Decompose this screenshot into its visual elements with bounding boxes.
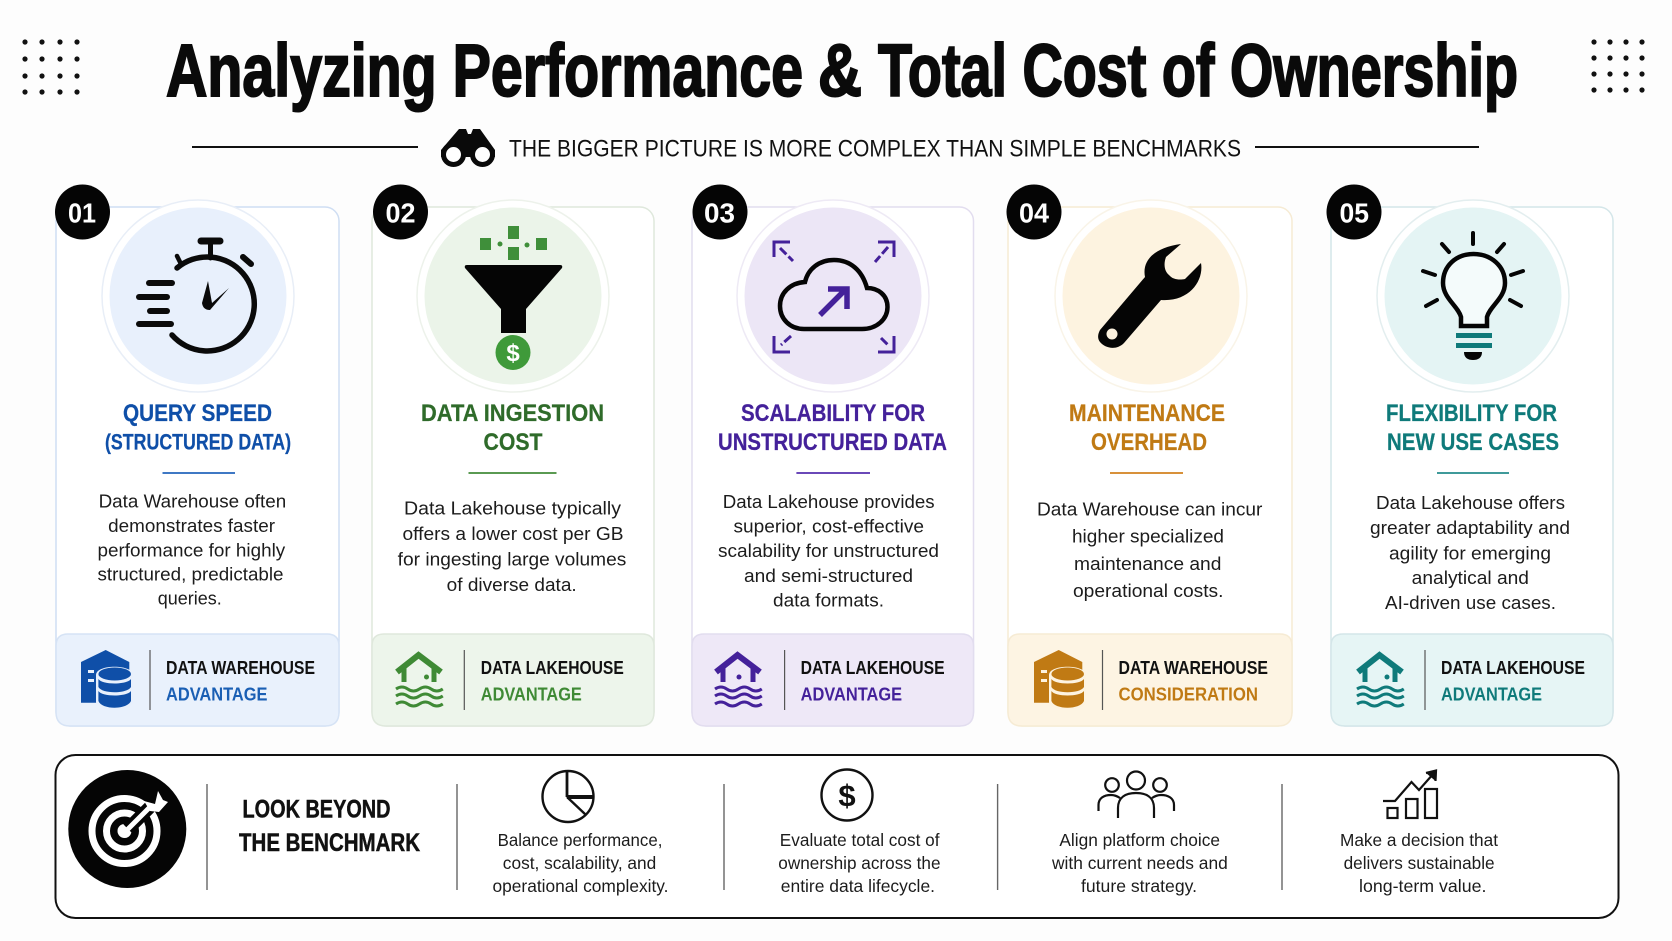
heading: OVERHEAD bbox=[1091, 429, 1207, 456]
body text bbox=[718, 491, 939, 610]
heading bbox=[421, 400, 604, 456]
callout heading: LOOK BEYOND bbox=[242, 796, 390, 824]
icon: dollar circle: $ bbox=[838, 778, 856, 813]
heading: QUERY SPEED bbox=[123, 400, 272, 427]
label: ADVANTAGE bbox=[166, 684, 268, 704]
item: decision bbox=[1340, 770, 1498, 896]
body text bbox=[98, 490, 286, 608]
label: ADVANTAGE bbox=[801, 684, 902, 704]
body text: greater adaptability and bbox=[1370, 517, 1570, 538]
number badge 03 bbox=[692, 184, 748, 240]
body text: agility for emerging bbox=[1389, 542, 1551, 564]
icon: dollar circle bbox=[822, 770, 872, 820]
card 05 advantage footer bbox=[1331, 634, 1613, 726]
panel: look beyond the benchmark bbox=[56, 755, 1618, 918]
panel: card 01 query speed bbox=[55, 184, 339, 726]
item: align: with current needs and bbox=[1051, 853, 1228, 873]
heading: SCALABILITY FOR bbox=[741, 400, 925, 427]
number badge 04 bbox=[1006, 184, 1062, 240]
body text: data formats. bbox=[773, 590, 884, 610]
heading: (STRUCTURED DATA) bbox=[105, 430, 291, 454]
number badge 02 bbox=[373, 184, 428, 240]
heading bbox=[105, 400, 291, 454]
body text: Data Lakehouse typically bbox=[404, 498, 622, 518]
body text: queries. bbox=[158, 588, 222, 608]
heading bbox=[718, 400, 947, 456]
label: DATA LAKEHOUSE bbox=[801, 657, 945, 678]
body text: AI-driven use cases. bbox=[1385, 592, 1556, 613]
item: total cost bbox=[778, 770, 940, 896]
panel: card 04 maintenance overhead bbox=[1006, 184, 1292, 726]
icon circle: funnel bbox=[417, 200, 609, 392]
heading: NEW USE CASES bbox=[1387, 429, 1559, 456]
heading bbox=[1386, 400, 1559, 456]
icon: people bbox=[1098, 772, 1174, 818]
panel: card 02 data ingestion cost bbox=[372, 184, 654, 726]
item: decision: long-term value. bbox=[1359, 876, 1486, 896]
heading: UNSTRUCTURED DATA bbox=[718, 429, 947, 456]
item: balance bbox=[492, 771, 668, 896]
label: DATA LAKEHOUSE bbox=[481, 657, 624, 678]
icon: target with arrow bbox=[68, 770, 186, 888]
card 03 advantage footer bbox=[692, 634, 974, 726]
subtitle text: THE BIGGER PICTURE IS MORE COMPLEX THAN SIMPLE BENCHMARKS bbox=[509, 136, 1241, 162]
body text bbox=[1370, 492, 1570, 613]
number badge 05: 05 bbox=[1340, 198, 1369, 228]
body text: demonstrates faster bbox=[108, 515, 275, 536]
number badge 04: 04 bbox=[1019, 198, 1049, 228]
number badge 01 bbox=[55, 184, 110, 240]
icon circle: cloud scaling bbox=[737, 200, 929, 392]
label: CONSIDERATION bbox=[1118, 684, 1258, 704]
label bbox=[166, 657, 315, 704]
body text: scalability for unstructured bbox=[718, 540, 939, 561]
title bbox=[166, 29, 1518, 112]
item: balance: operational complexity. bbox=[492, 876, 668, 896]
body text: Data Lakehouse offers bbox=[1376, 492, 1565, 513]
item: balance: cost, scalability, and bbox=[503, 853, 656, 873]
icon circle: wrench bbox=[1055, 200, 1247, 392]
body text: superior, cost-effective bbox=[734, 516, 924, 536]
icon circle: funnel: $ bbox=[506, 340, 520, 367]
heading: COST bbox=[484, 429, 543, 456]
body text: Data Warehouse often bbox=[99, 490, 286, 512]
label: ADVANTAGE bbox=[1441, 684, 1542, 704]
card 01 advantage footer bbox=[56, 634, 339, 726]
icon: binoculars bbox=[441, 129, 495, 164]
heading bbox=[1069, 400, 1225, 456]
body text: Data Lakehouse provides bbox=[723, 491, 935, 512]
body text: higher specialized bbox=[1072, 526, 1224, 546]
label: DATA LAKEHOUSE bbox=[1441, 657, 1585, 678]
label bbox=[1118, 657, 1268, 704]
callout heading: THE BENCHMARK bbox=[239, 829, 420, 857]
body text: for ingesting large volumes bbox=[398, 548, 626, 570]
decorative dot grid left bbox=[22, 39, 80, 95]
label: DATA WAREHOUSE bbox=[166, 657, 315, 678]
label bbox=[801, 657, 945, 704]
title: & bbox=[818, 29, 862, 112]
icon: data lakehouse bbox=[1357, 655, 1404, 706]
item: align: future strategy. bbox=[1081, 876, 1197, 896]
icon: data warehouse bbox=[1034, 650, 1086, 710]
card 04 consideration footer bbox=[1008, 634, 1292, 726]
body text: analytical and bbox=[1412, 567, 1529, 588]
body text: operational costs. bbox=[1073, 580, 1224, 601]
heading: FLEXIBILITY FOR bbox=[1386, 400, 1557, 427]
body text: performance for highly bbox=[98, 540, 286, 560]
body text: structured, predictable bbox=[98, 564, 284, 584]
item: total cost: entire data lifecycle. bbox=[781, 876, 935, 896]
card 02 advantage footer bbox=[372, 634, 654, 726]
heading: MAINTENANCE bbox=[1069, 400, 1225, 427]
label bbox=[481, 657, 624, 704]
number badge 02: 02 bbox=[386, 198, 416, 228]
item: decision: delivers sustainable bbox=[1344, 853, 1495, 873]
body text: Data Warehouse can incur bbox=[1037, 498, 1262, 520]
body text: offers a lower cost per GB bbox=[402, 523, 624, 544]
icon: growth chart bbox=[1383, 770, 1437, 818]
panel: card 03 scalability bbox=[692, 184, 974, 726]
item: balance: Balance performance, bbox=[498, 830, 662, 850]
title: Analyzing Performance bbox=[166, 29, 803, 112]
callout heading bbox=[239, 796, 420, 857]
item: align bbox=[1051, 772, 1228, 896]
number badge 03: 03 bbox=[704, 198, 735, 228]
label bbox=[1441, 657, 1585, 704]
number badge 01: 01 bbox=[68, 198, 96, 228]
icon circle: light bulb bbox=[1377, 200, 1569, 392]
item: total cost: Evaluate total cost of bbox=[780, 830, 940, 850]
number badge 05 bbox=[1326, 184, 1382, 240]
body text: maintenance and bbox=[1074, 553, 1221, 574]
icon circle: stopwatch bbox=[102, 200, 294, 392]
body text: and semi-structured bbox=[744, 565, 913, 586]
label: ADVANTAGE bbox=[481, 684, 582, 704]
item: total cost: ownership across the bbox=[778, 853, 940, 873]
item: decision: Make a decision that bbox=[1340, 830, 1498, 850]
icon: data lakehouse bbox=[715, 655, 762, 706]
body text bbox=[398, 498, 626, 595]
item: align: Align platform choice bbox=[1059, 830, 1220, 850]
body text bbox=[1037, 498, 1262, 601]
heading: DATA INGESTION bbox=[421, 400, 604, 427]
icon: pie chart bbox=[542, 771, 594, 822]
decorative dot grid right bbox=[1591, 39, 1645, 93]
body text: of diverse data. bbox=[447, 574, 577, 595]
icon: data lakehouse bbox=[396, 655, 443, 706]
icon: data warehouse bbox=[81, 650, 133, 710]
label: DATA WAREHOUSE bbox=[1118, 657, 1268, 678]
panel: card 05 flexibility bbox=[1326, 184, 1613, 726]
subtitle row bbox=[192, 129, 1479, 164]
